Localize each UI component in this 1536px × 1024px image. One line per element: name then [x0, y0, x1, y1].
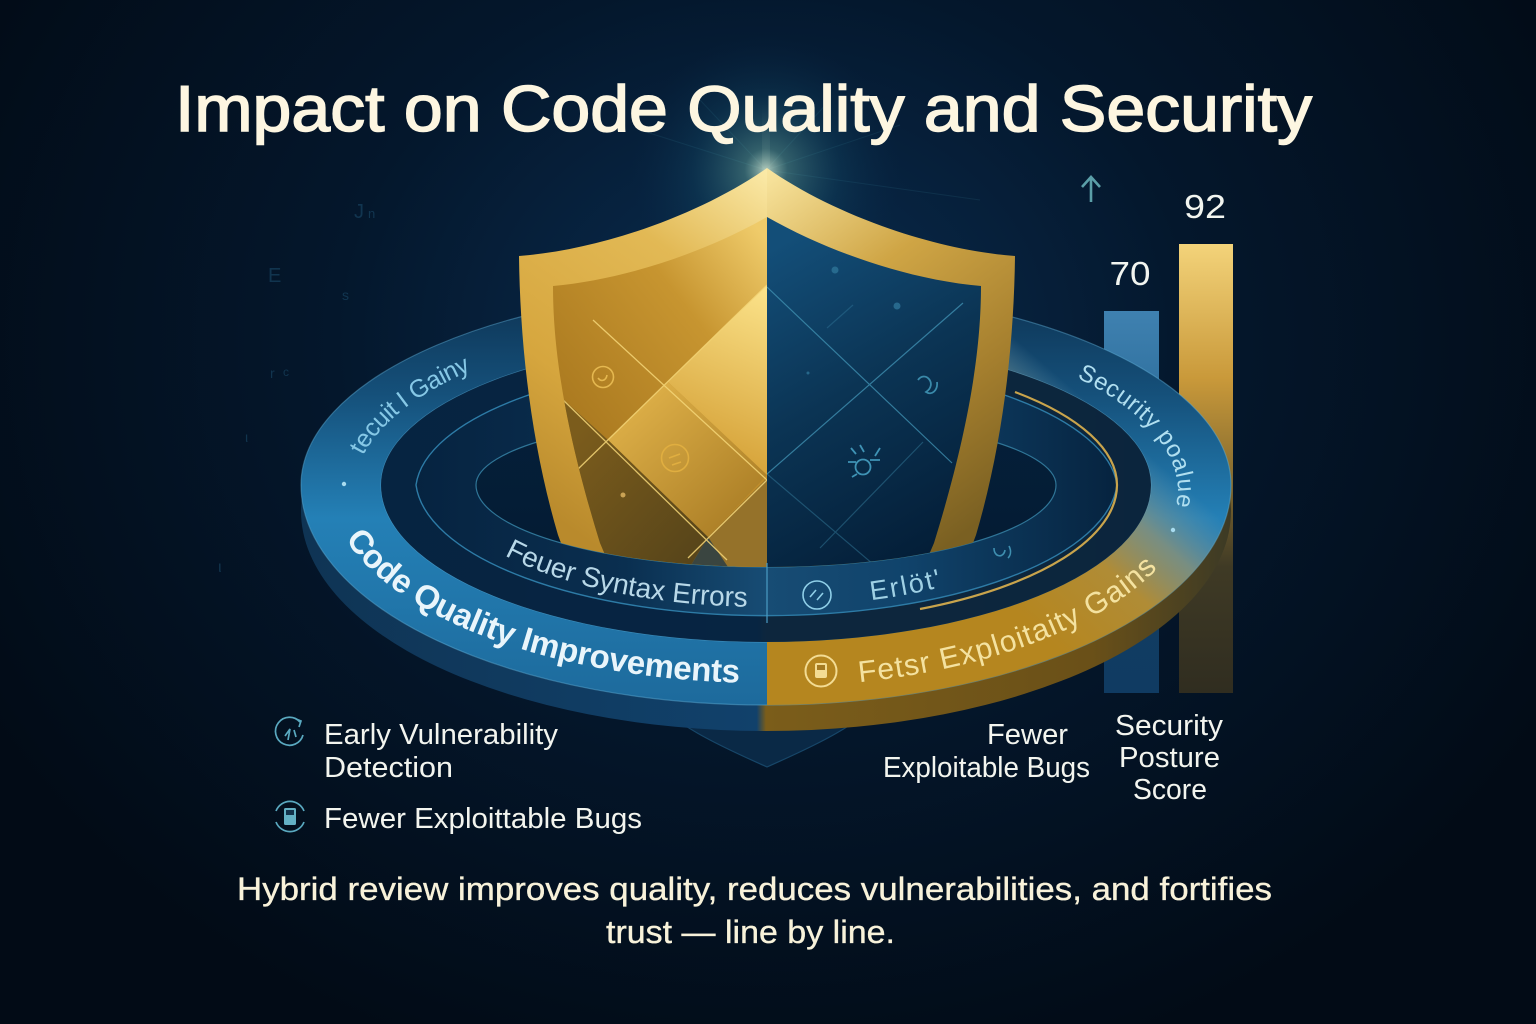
ring label: Erlot: Erlöt'	[870, 569, 938, 600]
faint background glyphs and rays: J	[354, 201, 364, 223]
faint background glyphs and rays: r	[270, 365, 275, 381]
closing statement: trust — line by line.	[606, 914, 895, 950]
chart label: Security Posture Score: Posture	[1119, 742, 1220, 774]
faint background glyphs and rays: c	[283, 365, 289, 379]
shield tip below the ring	[640, 690, 894, 767]
icon: lock on gold band	[806, 656, 836, 686]
legend: Fewer Exploittable Bugs	[276, 801, 642, 835]
icon: blob outline	[918, 377, 937, 393]
ring label: Code Quality Improvements: Code Quality Improvements	[350, 530, 738, 683]
ring: inner well	[476, 415, 1056, 567]
icon: up arrow	[1082, 177, 1100, 202]
icon: badge	[276, 801, 304, 832]
chart label: Fewer Exploitable Bugs: Fewer	[987, 719, 1068, 751]
legend: Early Vulnerability Detection	[276, 717, 558, 784]
ring: 3D base edge	[301, 313, 1231, 731]
ring label: Security poalue: Security poalue	[1079, 365, 1194, 506]
chart label: Fewer Exploitable Bugs: Exploitable Bugs	[883, 752, 1090, 784]
icon: dial on middle band	[803, 581, 831, 609]
faint background glyphs and rays: ι	[218, 559, 222, 576]
divider in middle band	[766, 563, 768, 623]
closing statement: Hybrid review improves quality, reduces vulnerabilities, and fortifies	[237, 871, 1272, 907]
faint background glyphs and rays: s	[342, 287, 349, 303]
faint background glyphs and rays	[218, 35, 980, 576]
chart label: Security Posture Score: Security	[1115, 710, 1224, 742]
shield frame: right half	[767, 168, 1015, 567]
shield face: left gold panel	[553, 217, 767, 567]
shield	[519, 168, 1015, 567]
ring label: tecuit I Gainy: tecuit I Gainy	[350, 358, 466, 454]
bar value 70: 70	[1110, 255, 1150, 292]
faint background glyphs and rays: n	[368, 206, 375, 221]
bar: 92 value	[1179, 244, 1233, 693]
shield frame: left half	[519, 168, 767, 567]
ring: middle band	[416, 360, 1117, 616]
legend text: Fewer Exploittable Bugs	[324, 803, 642, 835]
chart label: Security Posture Score: Score	[1133, 774, 1207, 806]
faint background glyphs and rays: E	[268, 265, 281, 287]
bar value 92: 92	[1184, 188, 1226, 225]
bar chart: security posture score	[1082, 177, 1233, 693]
shield face: right navy panel	[767, 217, 981, 567]
legend text: Early Vulnerability	[324, 719, 558, 751]
icon: gauge on gold panel lower	[662, 444, 688, 472]
ring label: Fewer Exploitability Gains: Fetsr Exploitaity Gains	[859, 560, 1156, 682]
icon: refresh arrows	[276, 717, 303, 745]
faint background glyphs and rays: ι	[245, 429, 248, 445]
ring dots	[342, 482, 1175, 532]
icon: light bulb	[848, 445, 880, 477]
ring label: Feuer Syntax Errors: Feuer Syntax Errors	[506, 539, 746, 607]
bar: 70 value	[1104, 311, 1159, 693]
speck on gold panel	[620, 492, 626, 498]
icon: gauge on gold panel upper	[592, 366, 614, 388]
ring: dark inner well	[381, 337, 1151, 642]
icon: small mark on middle band	[994, 546, 1011, 558]
ring: gold accent arc	[920, 392, 1117, 609]
title: Impact on Code Quality and Security	[175, 72, 1313, 145]
legend text: Detection	[324, 752, 453, 784]
infographic canvas	[180, 0, 1324, 950]
ring: outer band	[301, 287, 1231, 705]
